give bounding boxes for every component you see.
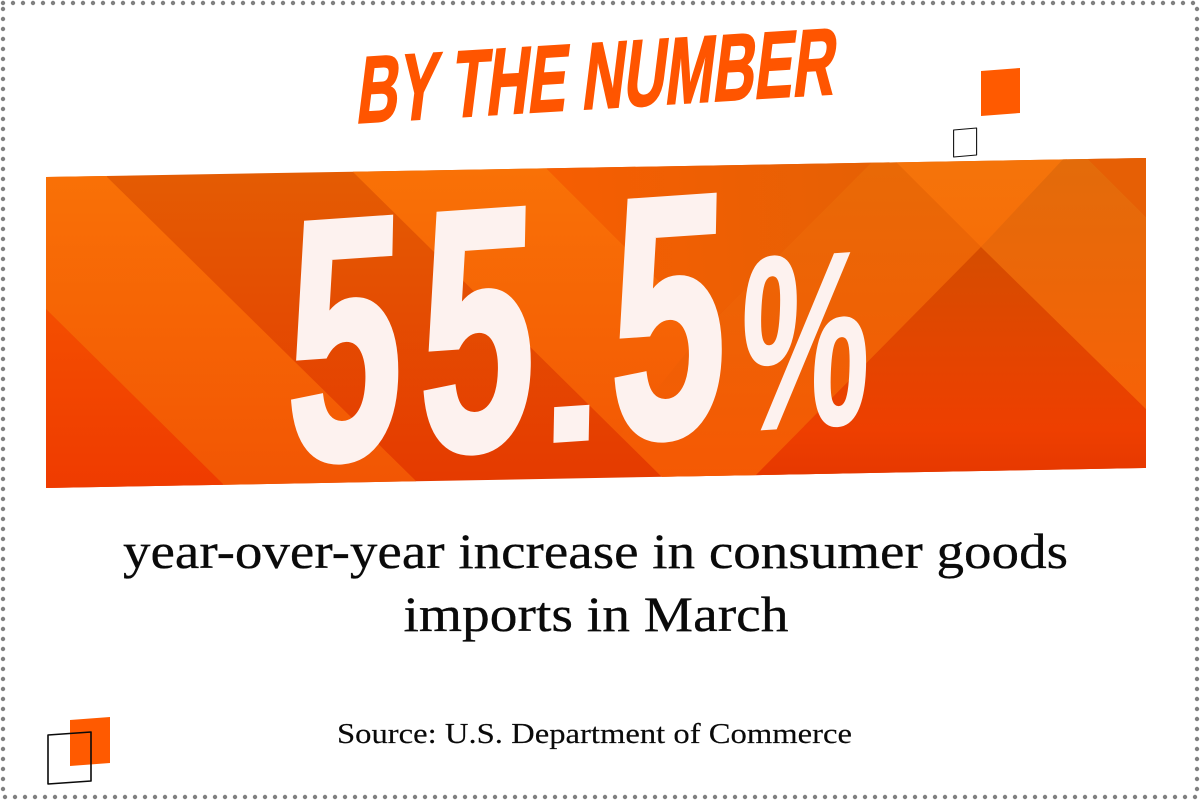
big number: 55.5% (284, 121, 876, 536)
title: BY THE NUMBER (352, 7, 844, 143)
big number: 55.5%: % (735, 198, 876, 485)
big number: 55.5%: 5 (417, 134, 539, 527)
big number: 55.5%: . (535, 222, 610, 495)
icon: bottom-left squares (48, 717, 110, 784)
banner: orange geometric band (40, 150, 1150, 495)
icon: small outlined square (954, 128, 977, 157)
source line: Source: U.S. Department of Commerce (337, 718, 852, 750)
big number: 55.5%: 5 (284, 143, 407, 536)
big number: 55.5%: 5 (608, 121, 730, 514)
description text (123, 523, 1068, 642)
description text: imports in March (404, 586, 788, 642)
icon: top orange square (981, 68, 1020, 116)
description text: year-over-year increase in consumer goods (123, 523, 1068, 579)
